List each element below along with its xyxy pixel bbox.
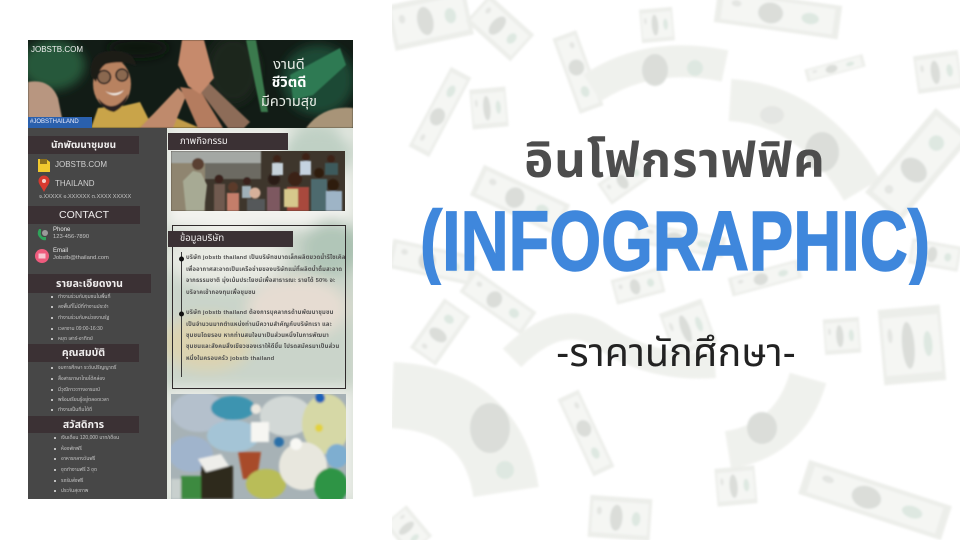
list: qualifications: สื่อสารภาษาไทยได้คล่อง [58,376,105,382]
photo: plastic waste [171,394,346,499]
list: job details: หยุด เสาร์-อาทิตย์ [58,336,93,342]
slogan: มีความสุข [261,94,317,110]
heading: benefits: สวัสดิการ [63,418,104,430]
slogan: งานดี [273,57,305,73]
heading: job details: รายละเอียดงาน [56,278,123,290]
heading: contact [28,206,140,224]
list: qualifications: จบการศึกษา ระดับปริญญาตรี [58,365,116,371]
slogan: ชีวิตดี [272,75,306,91]
text: company description: หนึ่งในครอบครัว jobstb thailand [186,356,274,362]
text: phone: 123-456-7890 [53,234,89,240]
list: qualifications: มีวุฒิภาวะทางอารมณ์ [58,387,100,393]
text: company description: บริจาคเข้ากองทุนเพื่อชุมชน [186,290,256,296]
list: qualifications [51,364,116,413]
text: company description: เป็นจำนวนมากตำแหน่งท่านมีความสำคัญกับบริษัทเรา และ [186,322,332,328]
text: company description: ชุมชนโดยรอบ หากท่านสนใจมาเป็นส่วนหนึ่งในการพัฒนา [186,333,329,339]
list: benefits: รถรับส่งฟรี [61,478,83,484]
icon: phone [38,229,48,240]
slogan [261,57,317,110]
list: benefits: ประกันสุขภาพ [61,488,88,494]
text: email [53,248,109,261]
list: benefits [54,434,119,494]
text: email: Jobstb@thailand.com [53,255,109,261]
heading: community developer [28,136,139,154]
background: falling dollar bills [392,0,960,540]
heading: activities: ภาพกิจกรรม [180,136,228,146]
heading: qualifications: คุณสมบัติ [62,347,105,359]
icon: email [35,249,49,263]
photo: community activity [171,151,345,211]
heading: company info [168,231,293,247]
list: benefits: ห้องพักฟรี [61,446,82,452]
text: country: THAILAND [55,179,95,188]
panel: company info [172,225,346,389]
heading: job details [28,274,151,293]
text: company description [186,253,345,362]
heading: qualifications [28,344,139,362]
timeline [179,252,184,377]
text: phone: Phone [53,227,70,233]
heading: company info: ข้อมูลบริษัท [180,233,224,244]
text: company description: จากธรรมชาติ มุ่งเน้นประโยชน์เพื่อสาธารณะ รายได้ 50% จะ [186,278,335,284]
right column background photo [167,128,353,499]
text: phone [53,226,89,240]
text: company description: เพื่ออากาศสะอาดเป็นเครือข่ายของบริษัทแม่ที่ผลิตน้ำดื่มสะอาด [186,267,342,273]
heading: activities [168,133,288,150]
title: Thai heading: อินโฟกราฟฟิค [524,134,826,188]
panel: infographic resume card [28,40,353,499]
header photo: man high-fiving: JOBSTB.COM [31,45,83,54]
text: website: JOBSTB.COM [55,160,107,169]
text: email: Email [53,248,68,254]
heading: contact: CONTACT [59,209,109,221]
text: company description: บริษัท jobstb thailand เป็นบริษัทขนาดเล็กผลิตขวดน้ำรีไซเคิล [186,255,345,261]
header photo: man high-fiving [28,40,353,128]
list: benefits: ชุดทำงานฟรี 3 ชุด [61,467,97,473]
text: address: จ.XXXXX อ.XXXXXX ต.XXXX XXXXX [39,194,131,200]
list: job details: ทำงานร่วมกับชุมชนในพื้นที่ [58,294,111,300]
list: qualifications: ทำงานเป็นทีมได้ดี [58,407,92,413]
panel: sidebar [28,128,167,499]
list: benefits: อาหารกลางวันฟรี [61,456,95,462]
icon: folder [38,159,50,172]
subtitle: student price: -ราคานักศึกษา- [556,331,796,375]
tag: #JOBSTHAILAND [28,117,92,128]
list: qualifications: พร้อมเรียนรู้อยู่ตลอดเวลา [58,397,109,403]
list: job details: เวลางาน 09:00-16:30 [58,326,103,332]
heading: community developer: นักพัฒนาชุมชน [51,140,116,151]
heading: benefits [28,416,139,433]
text: company description: ชุมชนและสังคมสิ่งเขียวของเราให้ดีขึ้น โปรดสมัครมาเป็นส่วน [186,344,339,350]
list: benefits: เงินเดือน 120,000 บาท/เดือน [61,435,119,441]
icon: map pin [38,176,50,192]
text: company description: บริษัท jobstb thailand ต้องการบุคลากรด้านพัฒนาชุมชน [186,310,334,316]
list: job details: ทำงานร่วมกับหน่วยงานรัฐ [58,315,109,321]
list: job details [51,293,111,342]
list: job details: ลงพื้นที่ไม่มีที่ทำงานประจำ [58,304,109,310]
tag: #JOBSTHAILAND: #JOBSTHAILAND [30,119,79,125]
